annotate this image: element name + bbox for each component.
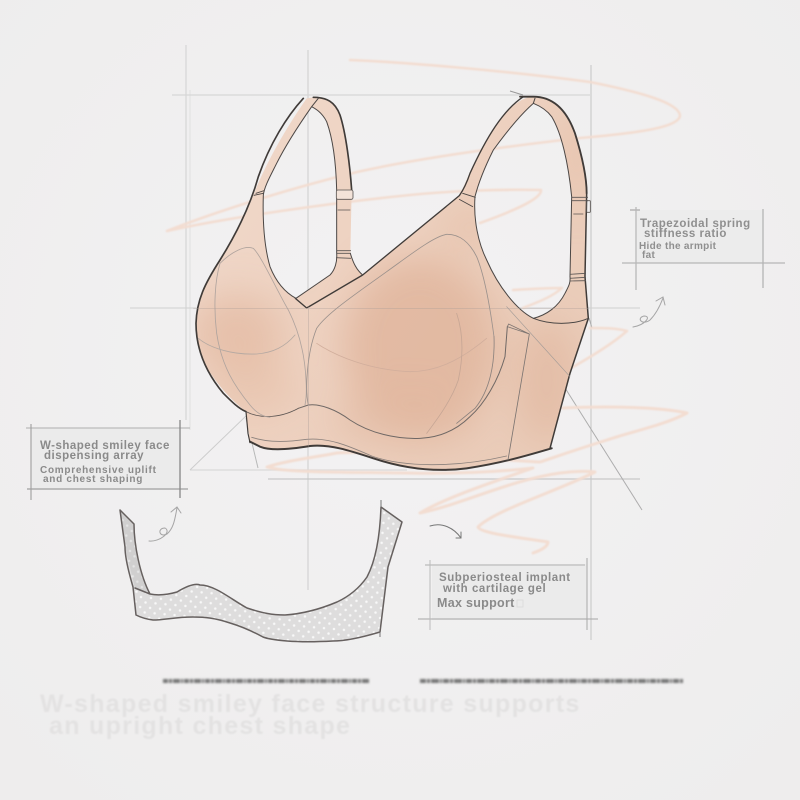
grid lines seen through garment <box>193 307 588 447</box>
callout box lines <box>26 420 190 500</box>
callout text <box>437 572 571 610</box>
garment fill <box>190 97 593 470</box>
faded headline <box>40 690 581 740</box>
callout text: Max support <box>437 596 515 610</box>
callout box lines <box>622 207 785 290</box>
darker stitched end <box>120 510 150 594</box>
callout box lines <box>418 558 598 630</box>
strap inner lines <box>254 98 588 323</box>
arrow: to trapezoidal callout <box>633 297 665 327</box>
callout text: dispensing array <box>44 450 144 462</box>
callout text: Comprehensive uplift <box>40 465 157 476</box>
callout: trapezoidal spring <box>622 207 785 290</box>
small empty glyph box <box>517 600 523 607</box>
callout text <box>639 218 751 261</box>
faded headline: an upright chest shape <box>49 712 351 740</box>
callout text: with cartilage gel <box>442 583 546 595</box>
callout text: and chest shaping <box>43 474 143 485</box>
callout text: Trapezoidal spring <box>640 218 751 230</box>
callout: W-shaped smiley face <box>26 420 190 500</box>
pink sketch scribbles <box>167 60 687 553</box>
callout text: stiffness ratio <box>644 228 727 240</box>
faded headline: W-shaped smiley face structure supports <box>40 690 581 718</box>
callout text: Subperiosteal implant <box>439 572 571 584</box>
mesh outline <box>120 507 402 642</box>
arrow: to subperiosteal callout <box>430 525 461 538</box>
construction grid lines <box>130 45 642 640</box>
cup seams <box>198 234 570 465</box>
blurred caption lines <box>163 679 683 683</box>
underwire panel with dot mesh <box>120 500 402 642</box>
illustration: bra <box>190 97 593 470</box>
strap sliders <box>336 190 590 281</box>
callout text: fat <box>642 250 655 261</box>
callout text: W-shaped smiley face <box>40 440 170 452</box>
callout text <box>40 440 170 485</box>
bold outer contour <box>196 97 588 470</box>
callout: subperiosteal implant <box>418 558 598 630</box>
arrow: to underwire from left callout <box>149 507 181 541</box>
callout text: Hide the armpit <box>639 241 717 252</box>
mesh fill <box>120 507 402 642</box>
